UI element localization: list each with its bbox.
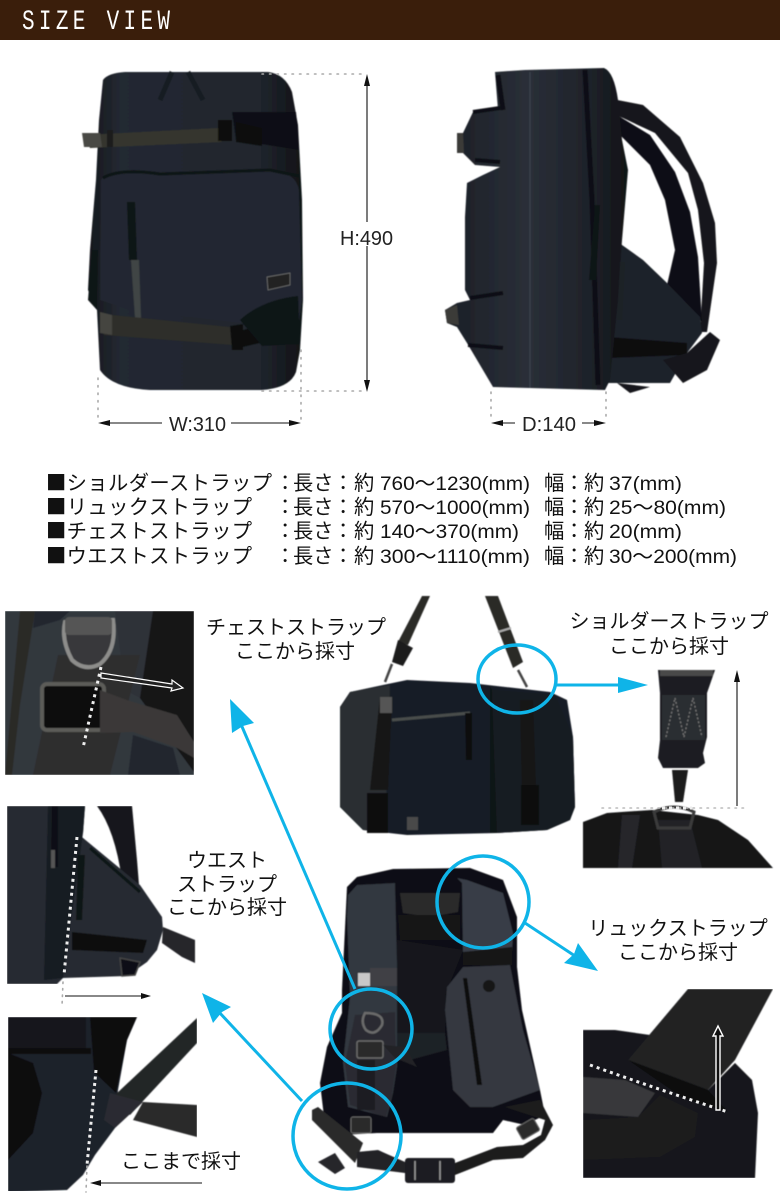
row: backpack strap: ：: [333, 490, 353, 520]
dimension: width 310: W:310: [169, 414, 226, 436]
row: backpack strap: [46, 490, 726, 520]
row: shoulder strap: 約: [354, 466, 374, 496]
row: chest strap: 約: [584, 514, 604, 544]
row: backpack strap: 約: [354, 490, 374, 520]
dimension: height 490: [262, 74, 393, 392]
circle: chest strap origin: [330, 989, 412, 1069]
row: shoulder strap: 約: [584, 466, 604, 496]
row: backpack strap: ：: [275, 490, 295, 520]
row: chest strap: 幅: [544, 514, 564, 544]
row: waist strap: 長さ: [293, 539, 334, 569]
row: chest strap: ：: [333, 514, 353, 544]
row: shoulder strap: ：: [564, 466, 584, 496]
label: chest strap: ここから採寸: [235, 640, 355, 663]
row: shoulder strap: 37(mm): [609, 473, 682, 495]
row: waist strap: ：: [564, 539, 584, 569]
row: waist strap: 約: [354, 539, 374, 569]
row: backpack strap: 570〜1000(mm): [380, 497, 530, 519]
row: waist strap: 300〜1110(mm): [380, 546, 530, 568]
row: shoulder strap: ：: [275, 466, 295, 496]
measure line: shoulder strap: [602, 670, 748, 808]
photo: bag back view: [312, 868, 553, 1183]
photo: bag front view: [82, 72, 303, 390]
row: shoulder strap: ■ショルダーストラップ: [46, 466, 272, 496]
label: chest strap: [206, 617, 386, 663]
label: backpack strap: リュックストラップ: [588, 917, 768, 940]
row: shoulder strap: 長さ: [293, 466, 334, 496]
measure line: backpack strap: [590, 1026, 728, 1112]
label: shoulder strap: ショルダーストラップ: [570, 610, 768, 633]
row: backpack strap: 約: [584, 490, 604, 520]
header bar: SIZE VIEW: [22, 8, 170, 38]
row: chest strap: [46, 514, 682, 544]
photo: bag top under hook: [583, 807, 773, 868]
row: backpack strap: ■リュックストラップ: [46, 490, 252, 520]
row: waist strap: 30〜200(mm): [609, 546, 737, 568]
label: measure to here: ここまで採寸: [121, 1150, 241, 1173]
row: chest strap: 20(mm): [609, 521, 682, 543]
measure line: waist strap back: [86, 1070, 202, 1192]
label: chest strap: チェストストラップ: [206, 617, 386, 639]
label: backpack strap: ここから採寸: [618, 941, 738, 964]
dimension: width 310: [98, 350, 301, 436]
photo: shoulder strap hook detail: [658, 670, 715, 802]
row: chest strap: ■チェストストラップ: [46, 514, 252, 544]
header bar: [0, 0, 780, 40]
circle: shoulder strap origin: [478, 645, 556, 713]
row: backpack strap: 長さ: [293, 490, 334, 520]
row: chest strap: 140〜370(mm): [380, 521, 519, 543]
row: waist strap: ■ウエストストラップ: [46, 539, 252, 569]
arrow: to backpack strap detail: [525, 923, 598, 971]
row: backpack strap: ：: [564, 490, 584, 520]
dimension: height 490: H:490: [340, 228, 393, 250]
row: chest strap: ：: [275, 514, 295, 544]
label: waist strap: ここから採寸: [167, 896, 287, 919]
label: shoulder strap: ここから採寸: [609, 635, 729, 658]
specification table: [46, 466, 737, 569]
photo: chest strap detail: [5, 611, 194, 775]
row: chest strap: 長さ: [293, 514, 334, 544]
row: shoulder strap: 760〜1230(mm): [380, 473, 530, 495]
row: shoulder strap: 幅: [544, 466, 564, 496]
row: waist strap: ：: [275, 539, 295, 569]
dimension: depth 140: D:140: [522, 414, 576, 436]
row: waist strap: [46, 539, 737, 569]
photo: waist strap back detail: [8, 1017, 197, 1192]
arrow: to shoulder strap detail: [556, 677, 648, 693]
photo: backpack strap detail: [583, 989, 773, 1178]
photo: bag hanging by shoulder strap: [340, 596, 575, 835]
row: shoulder strap: ：: [333, 466, 353, 496]
measure line: waist strap side: [62, 837, 151, 1006]
row: shoulder strap: [46, 466, 682, 496]
row: backpack strap: 幅: [544, 490, 564, 520]
circle: backpack strap origin: [437, 856, 529, 948]
label: waist strap: ストラップ: [177, 874, 277, 896]
label: backpack strap: [588, 917, 768, 964]
dimension: depth 140: [491, 392, 606, 436]
measure line: chest strap: [83, 667, 183, 748]
arrow: to waist strap detail: [202, 993, 302, 1101]
row: waist strap: 約: [584, 539, 604, 569]
row: waist strap: 幅: [544, 539, 564, 569]
label: shoulder strap: [570, 610, 768, 658]
arrow: to chest strap detail: [230, 699, 355, 989]
row: chest strap: 約: [354, 514, 374, 544]
row: chest strap: ：: [564, 514, 584, 544]
label: waist strap: ウエスト: [187, 850, 267, 872]
label: waist strap: [167, 850, 287, 919]
photo: bag side view: [445, 68, 720, 393]
circle: waist strap origin: [293, 1083, 401, 1189]
row: backpack strap: 25〜80(mm): [609, 497, 726, 519]
photo: waist strap side detail: [7, 806, 195, 984]
row: waist strap: ：: [333, 539, 353, 569]
